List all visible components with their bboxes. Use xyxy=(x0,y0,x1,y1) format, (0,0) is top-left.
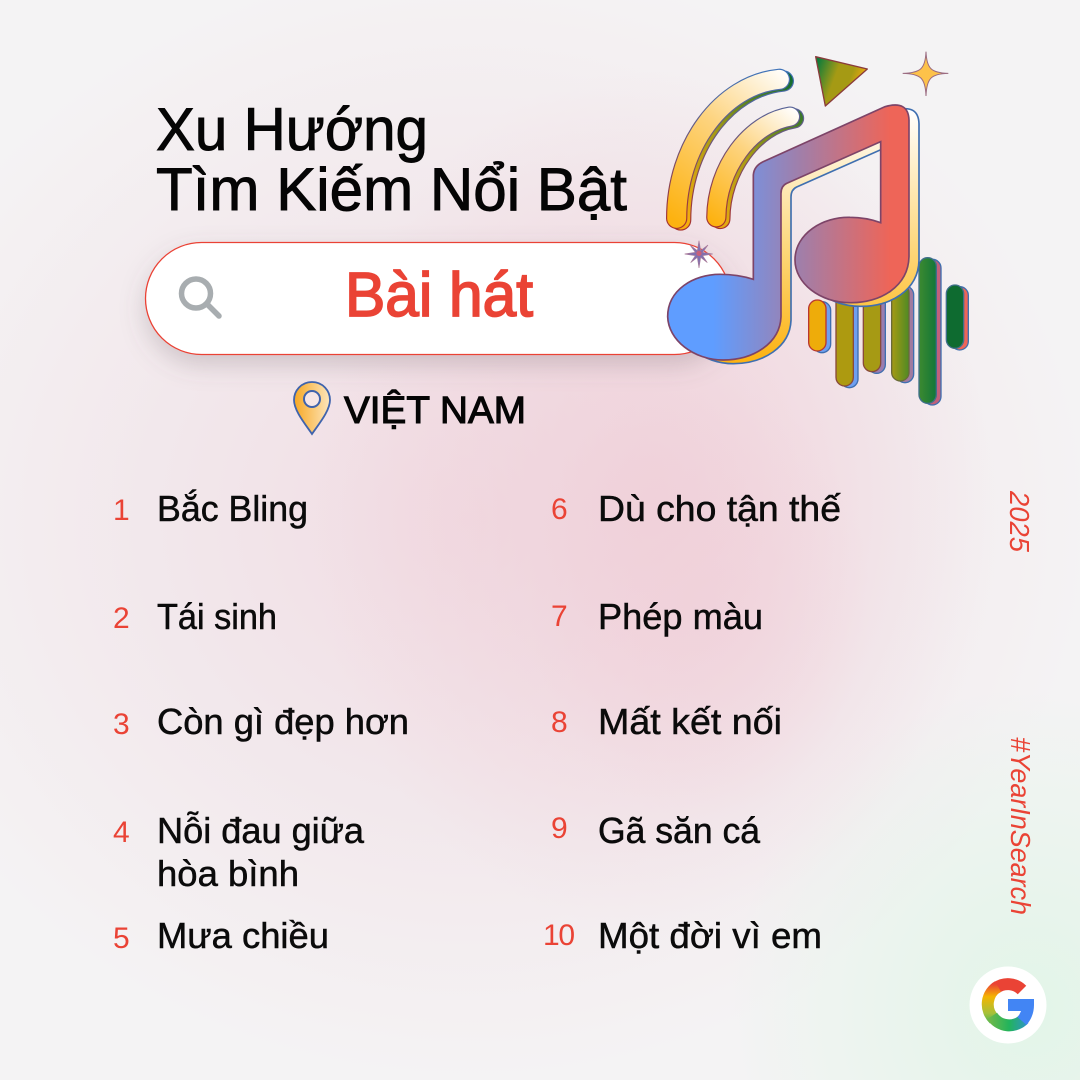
vertical hashtag: #YearInSearch xyxy=(1005,737,1036,915)
location label xyxy=(294,382,526,434)
google logo xyxy=(970,966,1046,1044)
ranked list: left column xyxy=(113,488,409,956)
search term: Bài hát xyxy=(345,261,533,330)
item 8: Mất kết nối xyxy=(598,701,782,742)
item 1: Bắc Bling xyxy=(157,488,308,529)
vertical year: 2025 xyxy=(1004,490,1035,552)
search bar xyxy=(146,242,730,354)
item 4 xyxy=(113,810,365,894)
item 5: Mưa chiều xyxy=(157,915,329,956)
item 10: Một đời vì em xyxy=(598,915,822,956)
item 5: 5 xyxy=(113,922,130,955)
item 8: 8 xyxy=(551,706,568,739)
music note xyxy=(668,105,919,364)
item 1: 1 xyxy=(113,494,130,527)
item 7: Phép màu xyxy=(598,596,763,637)
icon: triangle xyxy=(816,57,867,106)
item 4: hòa bình xyxy=(157,853,299,894)
icon: sound wave arcs xyxy=(677,79,794,220)
item 9: Gã săn cá xyxy=(598,810,761,851)
item 9: 9 xyxy=(551,812,568,845)
item 3: 3 xyxy=(113,708,130,741)
icon: magnifier xyxy=(182,279,219,316)
equalizer bars xyxy=(809,258,968,405)
title: Tìm Kiếm Nổi Bật xyxy=(156,156,627,223)
title xyxy=(156,96,627,223)
icon: small star xyxy=(685,241,713,268)
item 3: Còn gì đẹp hơn xyxy=(157,701,409,742)
item 2: 2 xyxy=(113,602,130,635)
icon: map pin xyxy=(294,382,330,434)
icon: four-point sparkle xyxy=(903,52,948,96)
country name: VIỆT NAM xyxy=(344,389,526,432)
item 10: 10 xyxy=(543,919,575,952)
item 6: Dù cho tận thế xyxy=(598,488,841,529)
item 4: Nỗi đau giữa xyxy=(157,810,365,851)
item 2: Tái sinh xyxy=(157,596,277,637)
title: Xu Hướng xyxy=(156,96,428,163)
music illustration xyxy=(668,52,968,405)
item 7: 7 xyxy=(551,600,568,633)
item 4: 4 xyxy=(113,816,130,849)
item 6: 6 xyxy=(551,493,568,526)
ranked list: right column xyxy=(543,488,841,956)
